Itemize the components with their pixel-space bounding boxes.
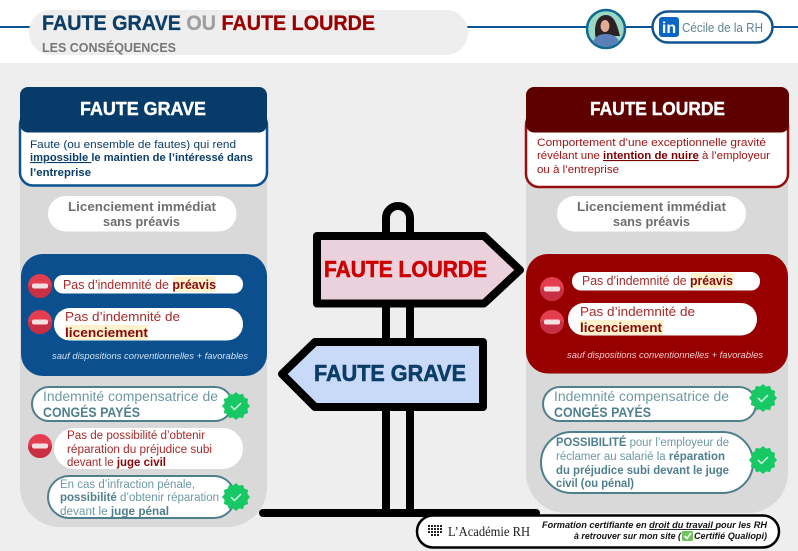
pill: licenciement: Pas d’indemnité de [580,305,695,319]
icon: qualiopi check [682,531,693,541]
pill: preavis: Pas d’indemnité de préavis [582,274,733,288]
definition box [526,112,788,187]
signpost [259,206,540,517]
sign: faute grave [282,342,483,407]
footer text line 1: Formation certifiante en droit du travail pour les RH [542,520,768,530]
note: sauf dispositions conventionnelles + favorables [52,351,248,362]
subtitle: LES CONSÉQUENCES [42,40,176,55]
pill: conges payes: CONGÉS PAYÉS [554,405,651,420]
icon: academy logo [428,525,442,536]
definition box: ou à l’entreprise [537,164,619,176]
definition box: Comportement d’une exceptionnelle gravité [537,137,766,149]
pill: juge civil: Pas de possibilité d’obtenir [67,430,205,442]
icon: check [749,384,777,412]
pill: juge civil: devant le juge civil [67,457,166,469]
pill: licenciement: Pas d’indemnité de [65,310,180,324]
header: FAUTE GRAVE [80,99,206,119]
pill: preavis [54,275,243,294]
pill: conges payes [543,387,756,421]
pill: conges payes: Indemnité compensatrice de [554,389,729,404]
pill: licenciement immediat: sans préavis [103,214,180,229]
linkedin name: Cécile de la RH [682,21,763,35]
definition box [20,112,267,186]
header: FAUTE LOURDE [590,99,725,119]
sign: faute grave: FAUTE GRAVE [314,360,466,386]
pill: possibilite [541,432,753,493]
panel: faute grave [20,87,267,527]
pill: preavis: Pas d’indemnité de préavis [63,278,216,292]
icon: linkedin: in [662,20,676,37]
pill: licenciement immediat: Licenciement immédiat [68,199,217,214]
pill: juge penal: En cas d’infraction pénale, [60,479,195,491]
icon: minus [28,274,52,298]
academy name: L’Académie RH [448,525,530,540]
pill: possibilite: réclamer au salarié la réparation [556,451,725,463]
definition box: impossible le maintien de l’intéressé dans [30,152,253,164]
icon: check [749,446,777,474]
pill: possibilite: civil (ou pénal) [556,478,634,490]
footer text line 2 end: Certifié Qualiopi) [694,531,767,541]
pill: licenciement [568,303,757,336]
pill: possibilite: du préjudice subi devant le juge [556,465,729,477]
icon: check [222,483,250,511]
pill: licenciement [54,308,243,340]
pill: juge civil [54,428,243,469]
pill: possibilite: POSSIBILITÉ pour l’employeur de [556,436,729,449]
pill: licenciement immediat [48,196,236,232]
note: sauf dispositions conventionnelles + favorables [567,350,763,361]
pill: conges payes: Indemnité compensatrice de [43,389,218,404]
definition box: révélant une intention de nuire à l’employeur [537,150,770,162]
author portrait [587,10,625,48]
icon: minus [540,277,564,301]
pill: juge penal [48,476,235,518]
panel: faute lourde [526,87,789,513]
linkedin badge [652,12,772,42]
icon: check [222,392,250,420]
pill: conges payes [32,387,232,421]
panel: pas d'indemnites [21,254,267,376]
sign: faute lourde [317,236,520,304]
title block [29,10,468,55]
sign: faute lourde: FAUTE LOURDE [324,256,487,282]
pill: conges payes: CONGÉS PAYÉS [43,405,140,420]
title: FAUTE GRAVE OU FAUTE LOURDE [42,12,375,35]
pill: juge penal: possibilité d’obtenir réparation [60,492,219,504]
pill: licenciement immediat: sans préavis [613,214,690,229]
pill: preavis [572,272,760,290]
pill: licenciement: licenciement [580,320,663,335]
pill: licenciement immediat: Licenciement immédiat [577,199,727,214]
panel: pas d'indemnites [526,254,788,374]
icon: minus [28,310,52,334]
pill: juge penal: devant le juge pénal [60,506,169,518]
header [20,87,267,132]
icon: minus [28,434,52,458]
pill: licenciement: licenciement [65,325,149,340]
footer banner [417,516,779,548]
pill: licenciement immediat [557,196,746,232]
header [526,87,789,132]
pill: juge civil: réparation du préjudice subi [67,444,212,456]
definition box: l’entreprise [30,167,91,179]
definition box: Faute (ou ensemble de fautes) qui rend [30,139,236,151]
icon: minus [540,310,564,334]
footer text line 2: à retrouver sur mon site ( [574,531,682,541]
